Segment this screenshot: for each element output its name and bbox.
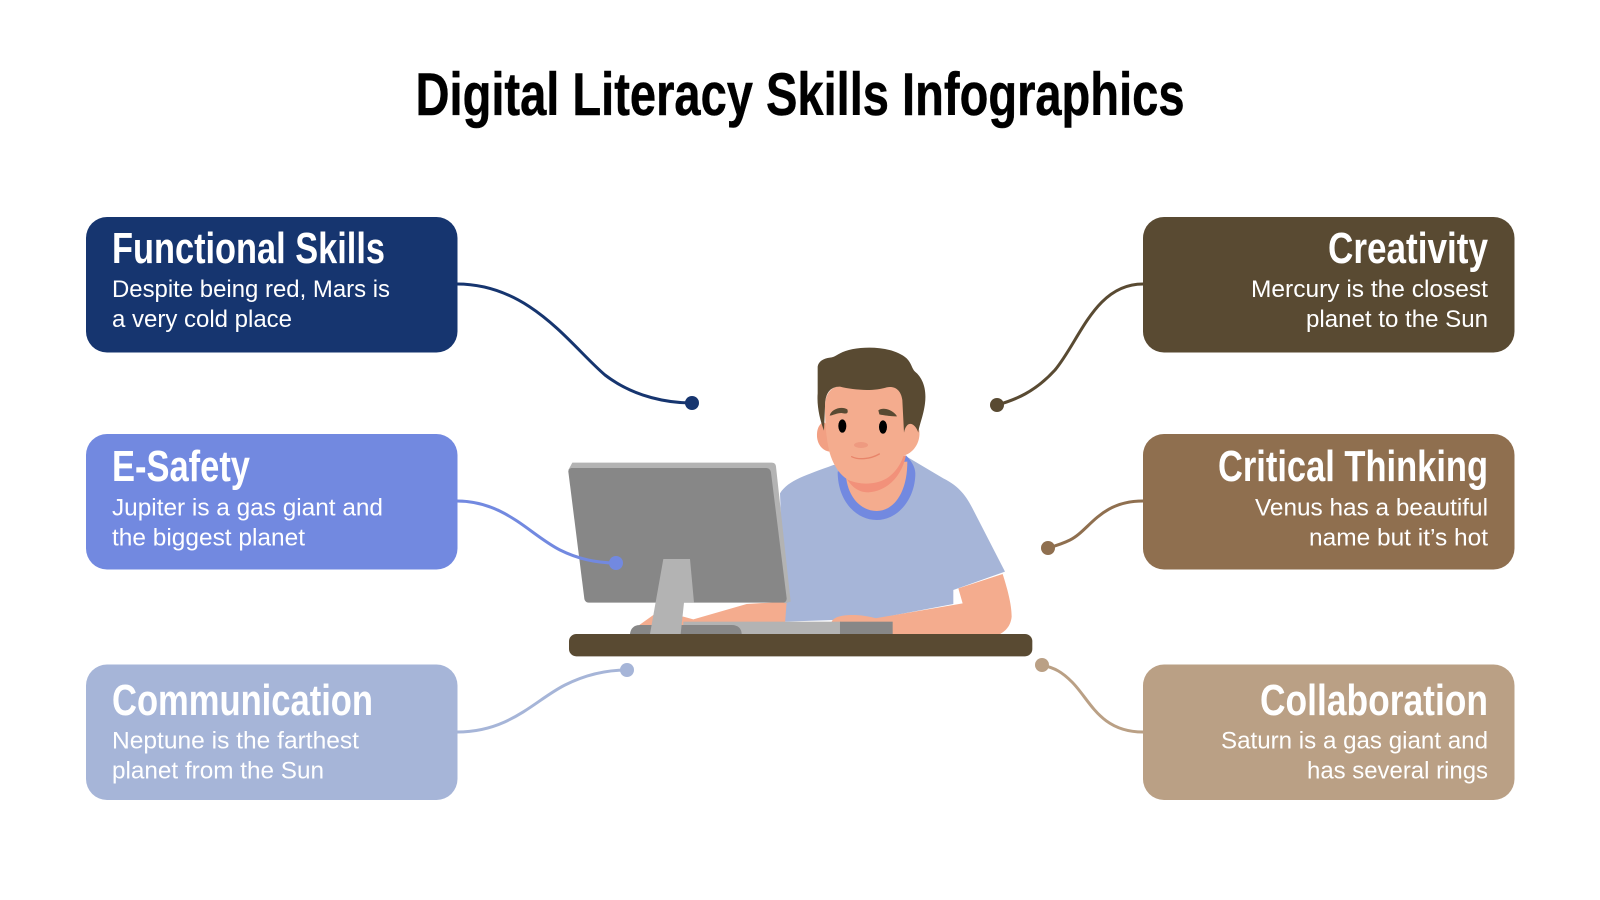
keyboard — [683, 622, 893, 634]
text: communication: planet from the Sun — [112, 758, 324, 784]
mouth — [852, 454, 879, 459]
eyes — [838, 419, 887, 434]
panel: creativity — [1143, 217, 1514, 352]
text: e-safety: the biggest planet — [112, 524, 305, 552]
text: functional skills: a very cold place — [112, 306, 292, 333]
connector: creativity — [990, 284, 1143, 412]
panel: communication — [86, 664, 458, 800]
face — [825, 386, 906, 484]
heading: critical thinking: Critical Thinking — [1218, 442, 1488, 491]
text: collaboration: Saturn is a gas giant and — [1221, 728, 1488, 754]
hair — [817, 348, 925, 433]
monitor base — [630, 625, 742, 634]
ears — [817, 422, 919, 456]
title: Digital Literacy Skills Infographics — [416, 61, 1184, 128]
text: collaboration: has several rings — [1307, 758, 1488, 784]
text: critical thinking: name but it’s hot — [1309, 524, 1488, 552]
connector: functional skills — [457, 284, 699, 410]
heading: communication: Communication — [112, 676, 373, 725]
connector: collaboration — [1035, 658, 1143, 732]
text: communication — [112, 728, 359, 784]
text: critical thinking: Venus has a beautiful — [1255, 494, 1488, 522]
panel: e-safety — [86, 434, 458, 570]
hand — [832, 615, 877, 623]
heading: collaboration: Collaboration — [1260, 676, 1488, 725]
connector: communication — [457, 663, 634, 732]
shirt — [780, 457, 1005, 622]
eyebrows — [830, 408, 897, 416]
text: creativity: planet to the Sun — [1306, 306, 1488, 333]
text: creativity — [1251, 276, 1488, 333]
connector: e-safety — [457, 501, 623, 570]
panel: collaboration — [1143, 664, 1514, 800]
panel: functional skills — [86, 217, 458, 352]
text: e-safety — [112, 494, 383, 552]
connector: critical thinking — [1041, 501, 1143, 555]
text: functional skills: Despite being red, Mars is — [112, 276, 390, 303]
text: creativity: Mercury is the closest — [1251, 276, 1488, 303]
text: e-safety: Jupiter is a gas giant and — [112, 494, 383, 522]
collar and neck — [838, 455, 915, 520]
nose — [854, 442, 868, 448]
text: functional skills — [112, 276, 390, 333]
heading: e-safety: E-Safety — [112, 442, 250, 491]
heading: creativity: Creativity — [1328, 224, 1488, 273]
text: communication: Neptune is the farthest — [112, 728, 359, 754]
right arm — [873, 574, 1012, 635]
monitor — [568, 463, 791, 603]
panel: critical thinking — [1143, 434, 1514, 570]
text: critical thinking — [1255, 494, 1488, 552]
monitor stand — [650, 559, 694, 634]
left arm — [639, 602, 787, 627]
text: collaboration — [1221, 728, 1488, 784]
desk — [569, 634, 1032, 656]
heading: functional skills: Functional Skills — [112, 224, 385, 273]
illustration: person at computer — [568, 348, 1032, 656]
